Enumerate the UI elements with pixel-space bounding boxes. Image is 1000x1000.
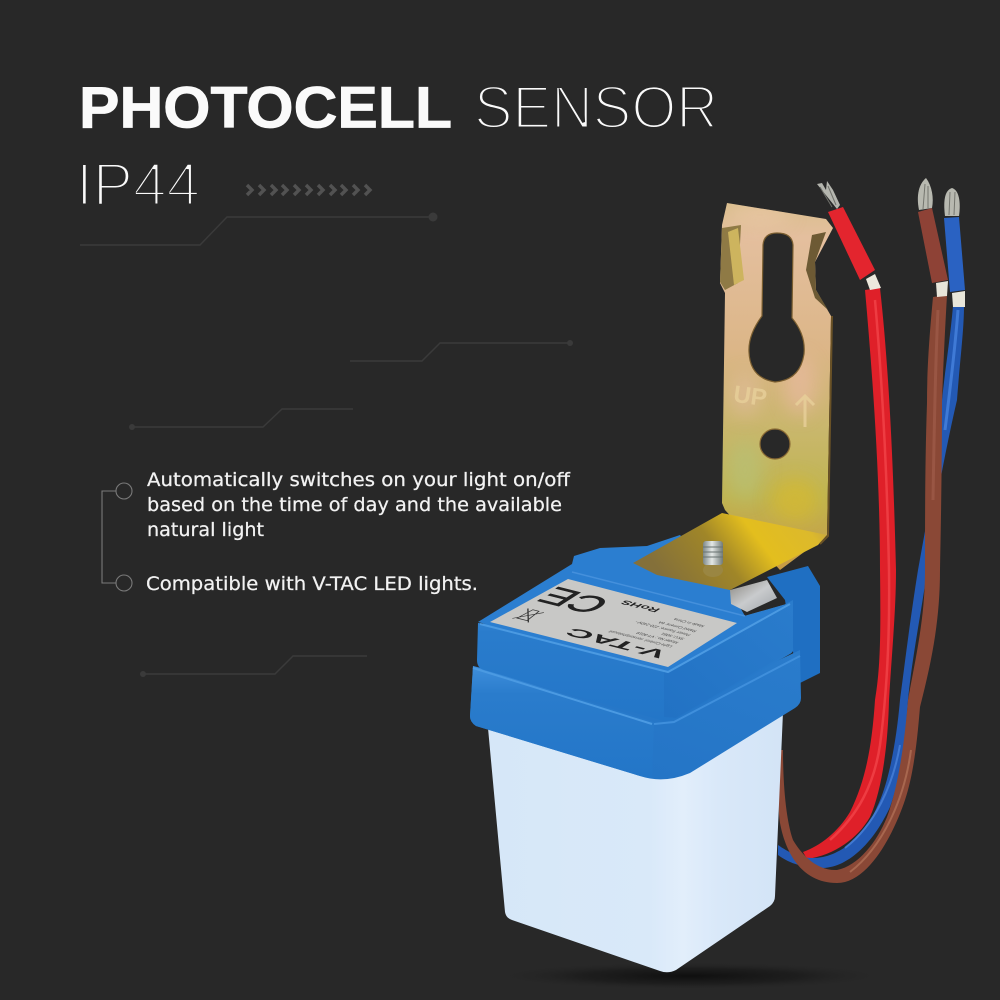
red wire [803, 181, 896, 859]
spec lines: SKU: 5081 [659, 632, 687, 640]
feature connector icon [102, 483, 132, 591]
right mounting wing [767, 566, 820, 684]
V-TAC logo: V-TAC [559, 625, 673, 661]
feature text [146, 469, 571, 595]
title: photocell sensor: SENSOR [474, 74, 718, 141]
lower blue cap band [470, 650, 801, 779]
embossed UP arrow text: UP [732, 381, 769, 412]
subtitle: IP44: IP44 [76, 151, 200, 218]
blue wire [778, 188, 965, 868]
WEEE bin [512, 609, 544, 622]
feature text: Compatible with V-TAC LED lights. [146, 573, 478, 595]
sensor body [470, 535, 820, 972]
bracket edge shading [820, 316, 832, 544]
embossed UP arrow text [732, 381, 814, 427]
spec lines: Power Source: 220-240V~ [634, 620, 693, 637]
bracket foot [633, 513, 827, 590]
CE mark: CE [529, 582, 619, 618]
feature text: based on the time of day and the available [147, 494, 562, 516]
product shadow [490, 962, 890, 990]
circuit line decorations [80, 212, 573, 677]
spec lines: Rated Current: 6A [656, 620, 699, 633]
product label [490, 579, 737, 667]
bracket holes [749, 233, 804, 382]
spec lines: Light-Control: sensor/photocell [607, 629, 675, 648]
RoHS mark: RoHS [618, 599, 663, 613]
spec lines [607, 609, 707, 648]
feature text: Automatically switches on your light on/off [147, 469, 571, 491]
brown wire [778, 178, 948, 883]
spec lines: Made in China [672, 617, 707, 628]
upper blue cap [477, 535, 793, 721]
wires [778, 178, 965, 883]
spec lines: Model No.: VT-8019 [634, 631, 681, 644]
metal bracket [633, 200, 835, 590]
white translucent housing [488, 712, 783, 972]
screw [703, 541, 723, 577]
chevron row [247, 185, 370, 195]
title: photocell sensor [79, 74, 718, 141]
feature text: natural light [147, 519, 264, 541]
title: photocell sensor: PHOTOCELL [79, 76, 452, 140]
bracket vertical plate [715, 200, 835, 570]
metal reflective clip [730, 580, 777, 612]
